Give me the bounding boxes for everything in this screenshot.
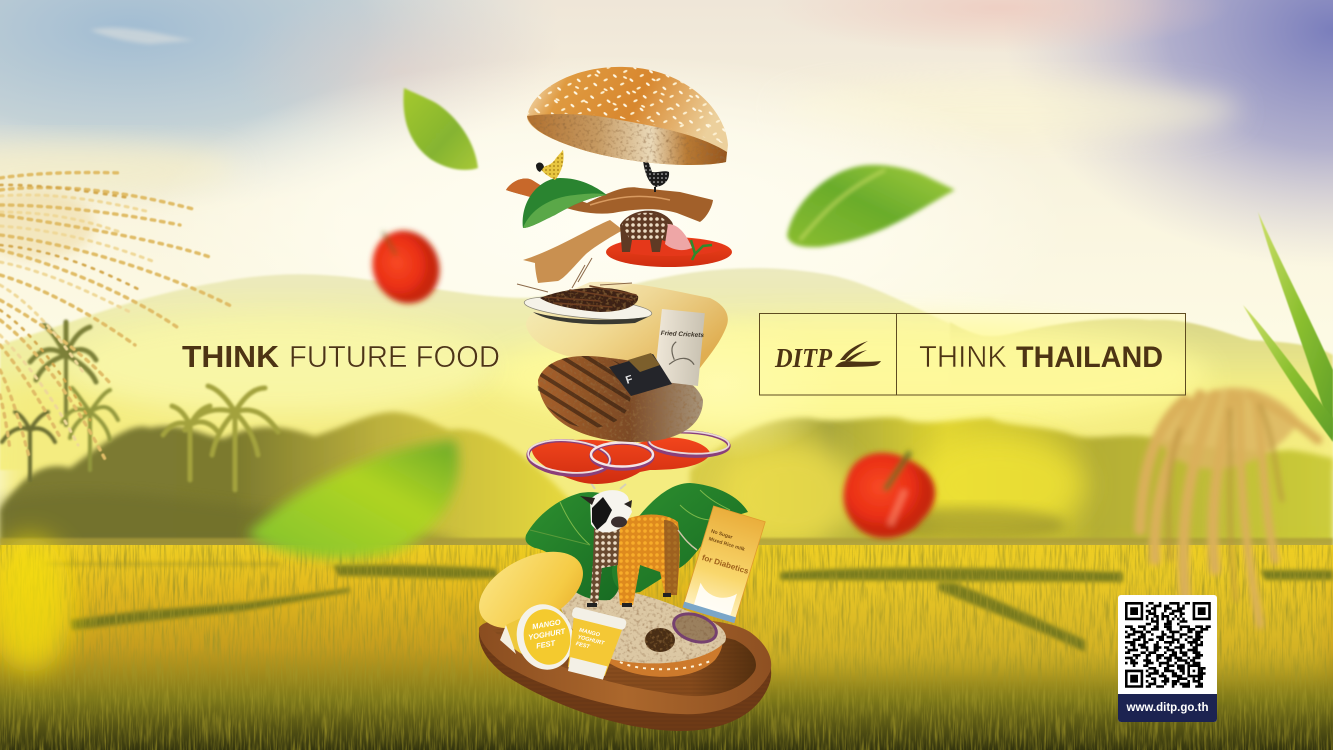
plate of fried crickets bbox=[517, 258, 653, 324]
fried crickets pack bbox=[654, 309, 706, 386]
DITP wing logo bbox=[835, 341, 881, 367]
background: rice field bbox=[0, 538, 1333, 750]
milk sachet: for diabetics: for Diabetics bbox=[701, 553, 750, 576]
headline: Think Future Food: THINK bbox=[182, 339, 280, 374]
tagline bbox=[919, 339, 1163, 374]
tomato slice top bbox=[606, 237, 732, 267]
black cricket-flour packet bbox=[609, 353, 672, 396]
yoghurt cup: tipped: MANGO bbox=[531, 617, 561, 631]
cow made of grains bbox=[580, 483, 697, 607]
fried crickets pack: Fried Crickets bbox=[660, 330, 705, 339]
yoghurt cup: standing: YOGHURT bbox=[577, 634, 605, 647]
DITP wordmark: DITP bbox=[774, 343, 832, 373]
yoghurt cup: tipped: FEST bbox=[535, 638, 557, 651]
QR code bbox=[1125, 602, 1211, 688]
tomato slices and onion rings bbox=[527, 429, 730, 484]
QR code card bbox=[1118, 595, 1217, 722]
floating tomato: right bbox=[844, 452, 935, 538]
headline: Think Future Food: FUTURE FOOD bbox=[289, 339, 500, 374]
headline: Think Future Food bbox=[182, 339, 500, 374]
yoghurt cup: standing: MANGO bbox=[578, 628, 601, 639]
bottom bun bbox=[556, 587, 726, 677]
background: distant mountains bbox=[0, 268, 1333, 470]
logo box: DITP Think Thailand bbox=[760, 314, 1186, 395]
bacon strips bbox=[506, 178, 713, 283]
armadillo pig bbox=[620, 211, 712, 260]
burger stack bbox=[467, 67, 771, 731]
mango bbox=[467, 536, 595, 644]
background: glow behind burger bbox=[600, 310, 840, 460]
yoghurt cup: standing bbox=[558, 606, 627, 682]
glow: blurred yellow foreground left bbox=[0, 537, 72, 673]
floating tomato: left bbox=[362, 220, 450, 314]
background: hazy valley glow bbox=[0, 315, 1333, 550]
yoghurt cup: tipped: YOGHURT bbox=[528, 626, 567, 642]
tagline: THAILAND bbox=[1016, 341, 1163, 374]
yoghurt cup: standing: FEST bbox=[575, 641, 591, 651]
milk sachet: for diabetics bbox=[683, 506, 765, 623]
milk sachet: for diabetics: Mixed Rice milk bbox=[708, 536, 746, 553]
onion ring on bun bbox=[670, 609, 720, 647]
yellow grain chicken bbox=[536, 150, 564, 180]
yoghurt cup: tipped bbox=[500, 598, 580, 676]
background: sky bbox=[0, 0, 1333, 560]
tagline: THINK bbox=[919, 339, 1007, 374]
rice stalks: top left bbox=[0, 173, 233, 463]
floating basil leaf: right, motion blurred bbox=[787, 165, 955, 247]
background: tree line right bbox=[690, 417, 1333, 550]
black grain chicken bbox=[643, 160, 669, 192]
top sesame bun bbox=[527, 67, 728, 165]
lettuce bbox=[525, 483, 748, 600]
wooden serving plate bbox=[479, 614, 771, 731]
website url: www.ditp.go.th bbox=[1126, 702, 1208, 714]
black cricket-flour packet: F bbox=[624, 373, 635, 387]
background: tree line left with palms bbox=[0, 322, 570, 548]
grilled patty bbox=[538, 356, 703, 442]
rice stalks and grass blades: right bbox=[1140, 212, 1333, 625]
cheese slice bbox=[526, 282, 728, 375]
floating basil leaf: top left bbox=[403, 88, 478, 170]
floating basil leaf: lower left, motion blurred bbox=[247, 440, 459, 558]
milk sachet: for diabetics: No Sugar bbox=[710, 529, 733, 541]
basil leaf on bacon bbox=[523, 178, 607, 228]
